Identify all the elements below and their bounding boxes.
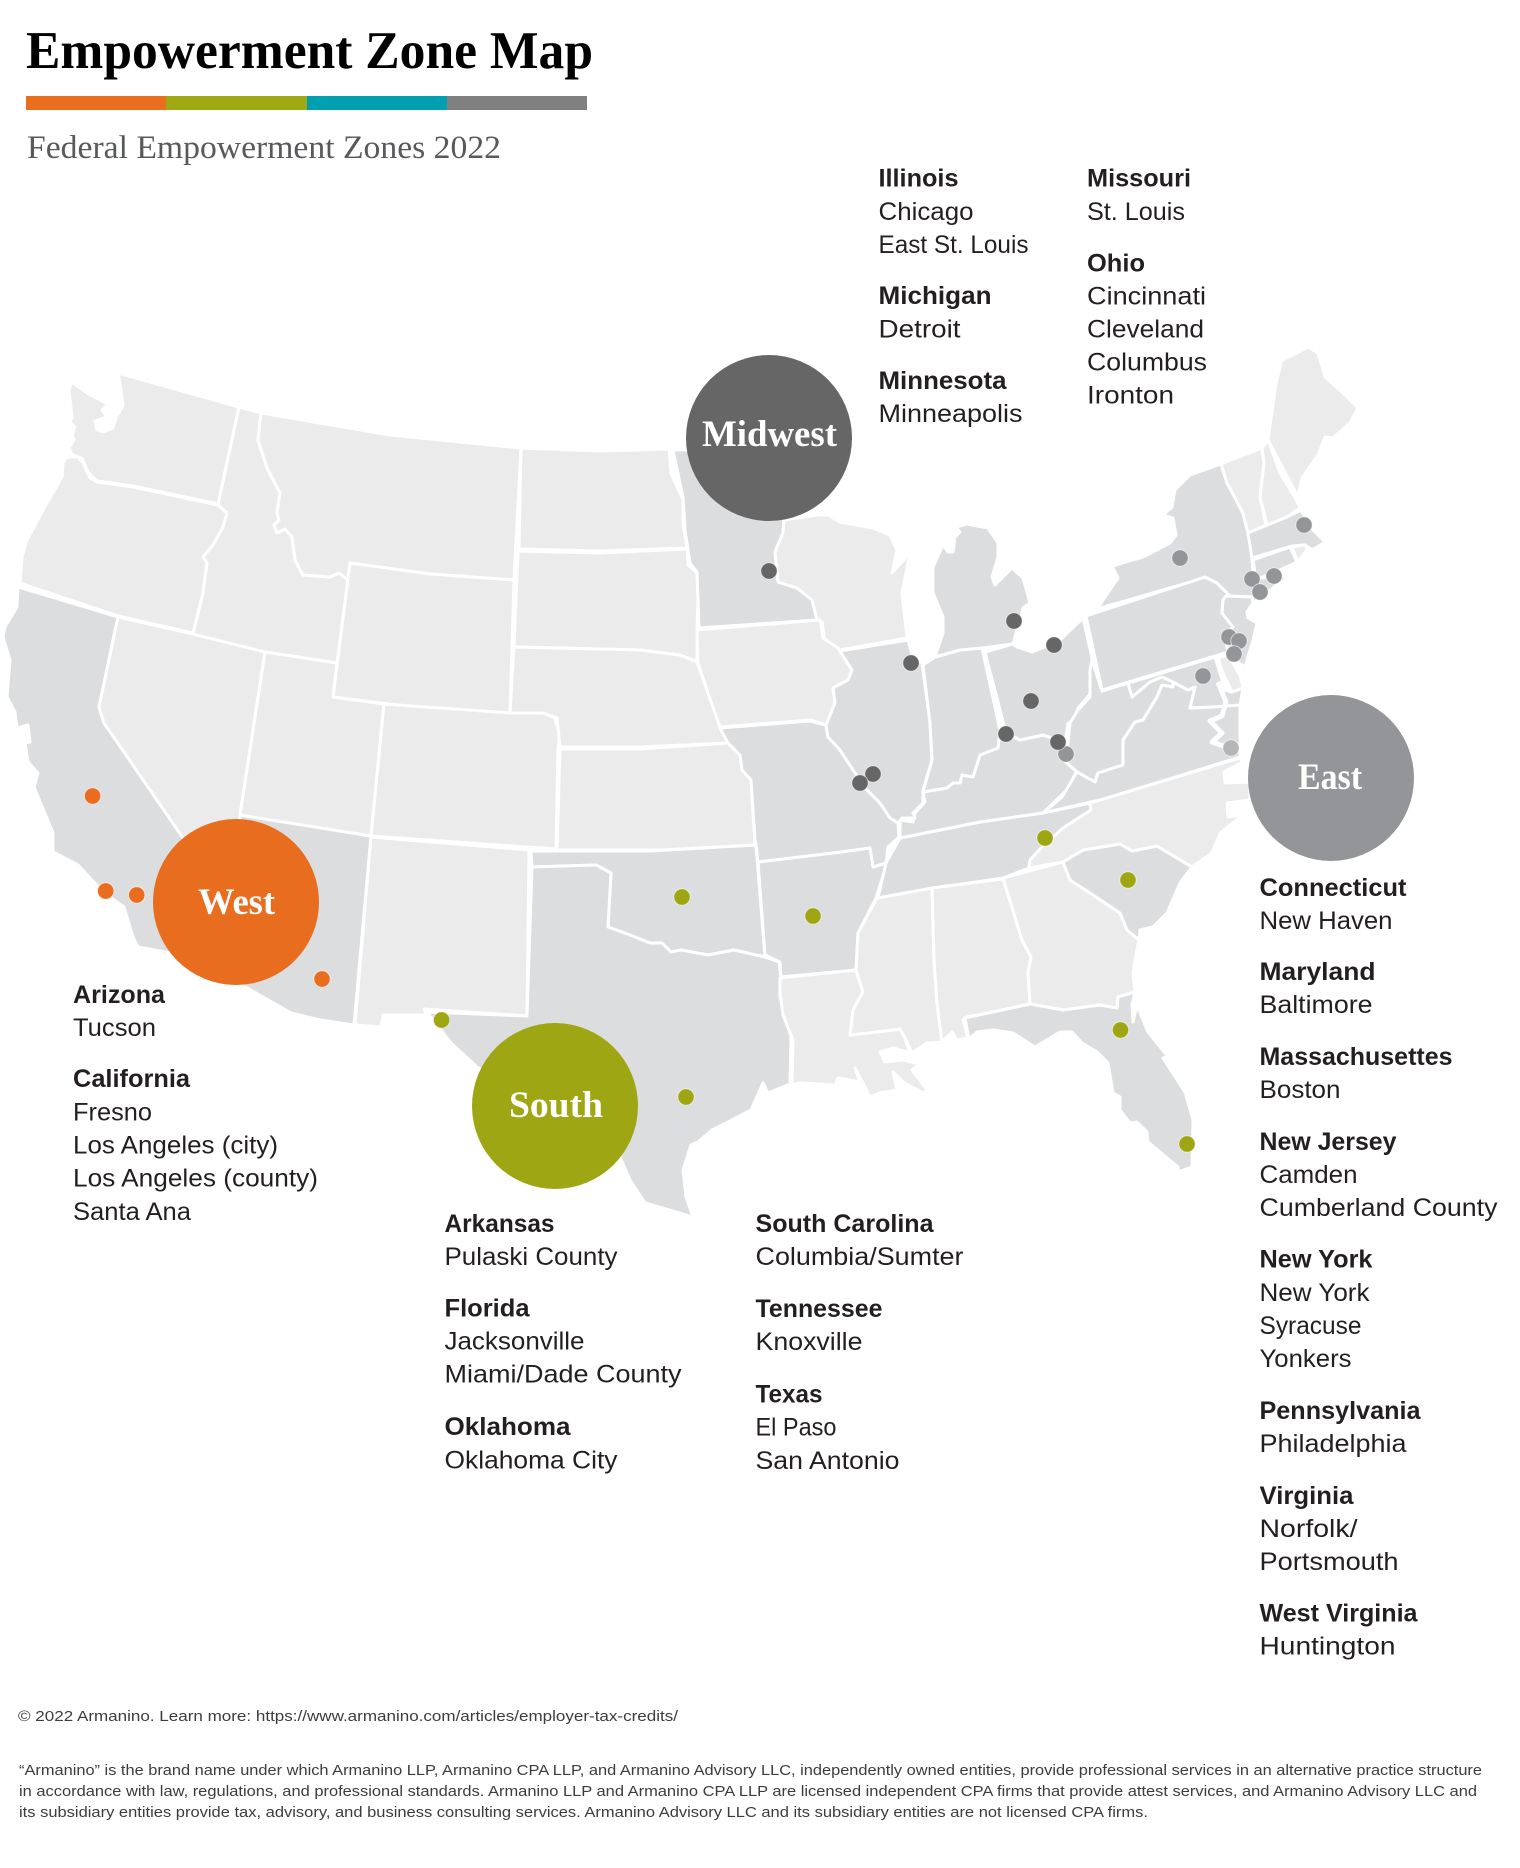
list: East zones: New Jersey bbox=[1260, 1128, 1397, 1156]
list: South zones, column 2: Texas bbox=[756, 1380, 822, 1408]
list: South zones, column 2: Tennessee bbox=[756, 1295, 883, 1323]
title: Empowerment Zone Map bbox=[26, 22, 593, 80]
list: Midwest zones, column 1: Detroit bbox=[878, 316, 961, 344]
list: Midwest zones, column 1: Minneapolis bbox=[878, 400, 1022, 428]
list: East zones: Massachusettes bbox=[1260, 1043, 1452, 1071]
list: Midwest zones, column 2: Cleveland bbox=[1087, 316, 1204, 344]
list: Midwest zones, column 1: Illinois bbox=[878, 164, 958, 192]
list: Midwest zones, column 2: Cincinnati bbox=[1087, 282, 1206, 310]
map: United States bbox=[3, 347, 1358, 1217]
list: Midwest zones, column 2: Ironton bbox=[1087, 382, 1174, 410]
list: South zones, column 1: Oklahoma City bbox=[444, 1446, 618, 1474]
list: Midwest zones, column 1: Minnesota bbox=[878, 367, 1008, 395]
list: East zones: Cumberland County bbox=[1260, 1194, 1498, 1222]
list: East zones: Virginia bbox=[1260, 1482, 1355, 1510]
list: East zones: Portsmouth bbox=[1260, 1548, 1398, 1576]
region badge: Midwest: Midwest bbox=[702, 414, 838, 455]
list: East zones: Philadelphia bbox=[1260, 1430, 1407, 1458]
list: East zones: Pennsylvania bbox=[1260, 1397, 1422, 1425]
list: Midwest zones, column 1: East St. Louis bbox=[878, 231, 1028, 259]
region badge: Midwest bbox=[686, 355, 852, 521]
list: East zones: New Haven bbox=[1260, 907, 1392, 935]
list: South zones, column 1: Pulaski County bbox=[444, 1243, 618, 1271]
list: Midwest zones, column 1: Michigan bbox=[878, 282, 992, 310]
list: South zones, column 2: San Antonio bbox=[756, 1447, 900, 1475]
region badge: East bbox=[1248, 695, 1414, 861]
list: South zones, column 1: Arkansas bbox=[444, 1210, 554, 1238]
list: East zones: Camden bbox=[1260, 1161, 1358, 1189]
list: East zones: West Virginia bbox=[1260, 1600, 1419, 1628]
list: East zones: Maryland bbox=[1260, 958, 1376, 986]
map dots: West bbox=[84, 788, 330, 987]
list: South zones, column 2: Columbia/Sumter bbox=[756, 1243, 964, 1271]
list: West zones: Los Angeles (county) bbox=[73, 1164, 318, 1192]
list: East zones: Yonkers bbox=[1260, 1345, 1352, 1373]
list: South zones, column 2: South Carolina bbox=[756, 1210, 935, 1238]
list: East zones: Syracuse bbox=[1260, 1312, 1362, 1340]
list: East zones: New York bbox=[1260, 1279, 1370, 1307]
list: Midwest zones, column 2: St. Louis bbox=[1087, 198, 1185, 226]
list: West zones: Tucson bbox=[73, 1014, 156, 1042]
list: South zones, column 2: El Paso bbox=[756, 1414, 836, 1442]
list: West zones: Los Angeles (city) bbox=[73, 1132, 278, 1160]
region badge: South bbox=[472, 1023, 638, 1189]
list: West zones: Santa Ana bbox=[73, 1198, 191, 1226]
colour bar bbox=[26, 96, 587, 110]
list: Midwest zones, column 2 bbox=[1087, 164, 1207, 410]
legal disclaimer bbox=[19, 1763, 1482, 1821]
list: West zones: California bbox=[73, 1065, 191, 1093]
list: West zones: Arizona bbox=[73, 981, 166, 1009]
list: South zones, column 2 bbox=[756, 1210, 964, 1475]
map dots: East bbox=[1058, 517, 1312, 762]
list: East zones: Boston bbox=[1260, 1076, 1340, 1104]
list: South zones, column 2: Knoxville bbox=[756, 1328, 862, 1356]
map dots: South bbox=[433, 830, 1195, 1152]
list: South zones, column 1: Oklahoma bbox=[444, 1413, 572, 1441]
list: Midwest zones, column 1: Chicago bbox=[878, 198, 974, 226]
legal disclaimer: its subsidiary entities provide tax, advisory, and business consulting services. Armanino Advisory LLC and its subsidiary entities are not licensed CPA firms. bbox=[19, 1805, 1148, 1821]
region badge: West: West bbox=[198, 882, 276, 923]
subtitle: Federal Empowerment Zones 2022 bbox=[27, 130, 501, 166]
region badge: East: East bbox=[1298, 757, 1363, 798]
list: Midwest zones, column 2: Ohio bbox=[1087, 250, 1145, 278]
region badge: West bbox=[153, 819, 319, 985]
legal disclaimer: “Armanino” is the brand name under which Armanino LLP, Armanino CPA LLP, and Armanino Advisory LLC, independently owned entities, provide professional services in an alternative practice structure bbox=[19, 1763, 1482, 1779]
list: East zones: Norfolk/ bbox=[1260, 1515, 1358, 1543]
map dots: Midwest bbox=[761, 563, 1066, 791]
list: East zones bbox=[1260, 874, 1498, 1660]
list: South zones, column 1 bbox=[444, 1210, 682, 1474]
list: West zones bbox=[73, 981, 318, 1226]
list: Midwest zones, column 2: Missouri bbox=[1087, 164, 1191, 192]
list: South zones, column 1: Miami/Dade County bbox=[444, 1360, 682, 1388]
Chesapeake Bay inlet bbox=[1210, 682, 1226, 747]
list: East zones: Huntington bbox=[1260, 1632, 1396, 1660]
list: South zones, column 1: Florida bbox=[444, 1294, 531, 1322]
list: Midwest zones, column 1 bbox=[878, 164, 1028, 428]
list: East zones: New York bbox=[1260, 1246, 1373, 1274]
list: West zones: Fresno bbox=[73, 1098, 152, 1126]
copyright line: © 2022 Armanino. Learn more: https://www.armanino.com/articles/employer-tax-credits/ bbox=[18, 1709, 679, 1725]
list: East zones: Baltimore bbox=[1260, 991, 1372, 1019]
list: East zones: Connecticut bbox=[1260, 874, 1407, 902]
list: Midwest zones, column 2: Columbus bbox=[1087, 348, 1207, 376]
legal disclaimer: in accordance with law, regulations, and professional standards. Armanino LLP and Armanino CPA LLP are licensed independent CPA firms that provide attest services, and Armanino Advisory LLC and bbox=[19, 1784, 1477, 1800]
list: South zones, column 1: Jacksonville bbox=[444, 1328, 584, 1356]
region badge: South: South bbox=[509, 1085, 603, 1126]
